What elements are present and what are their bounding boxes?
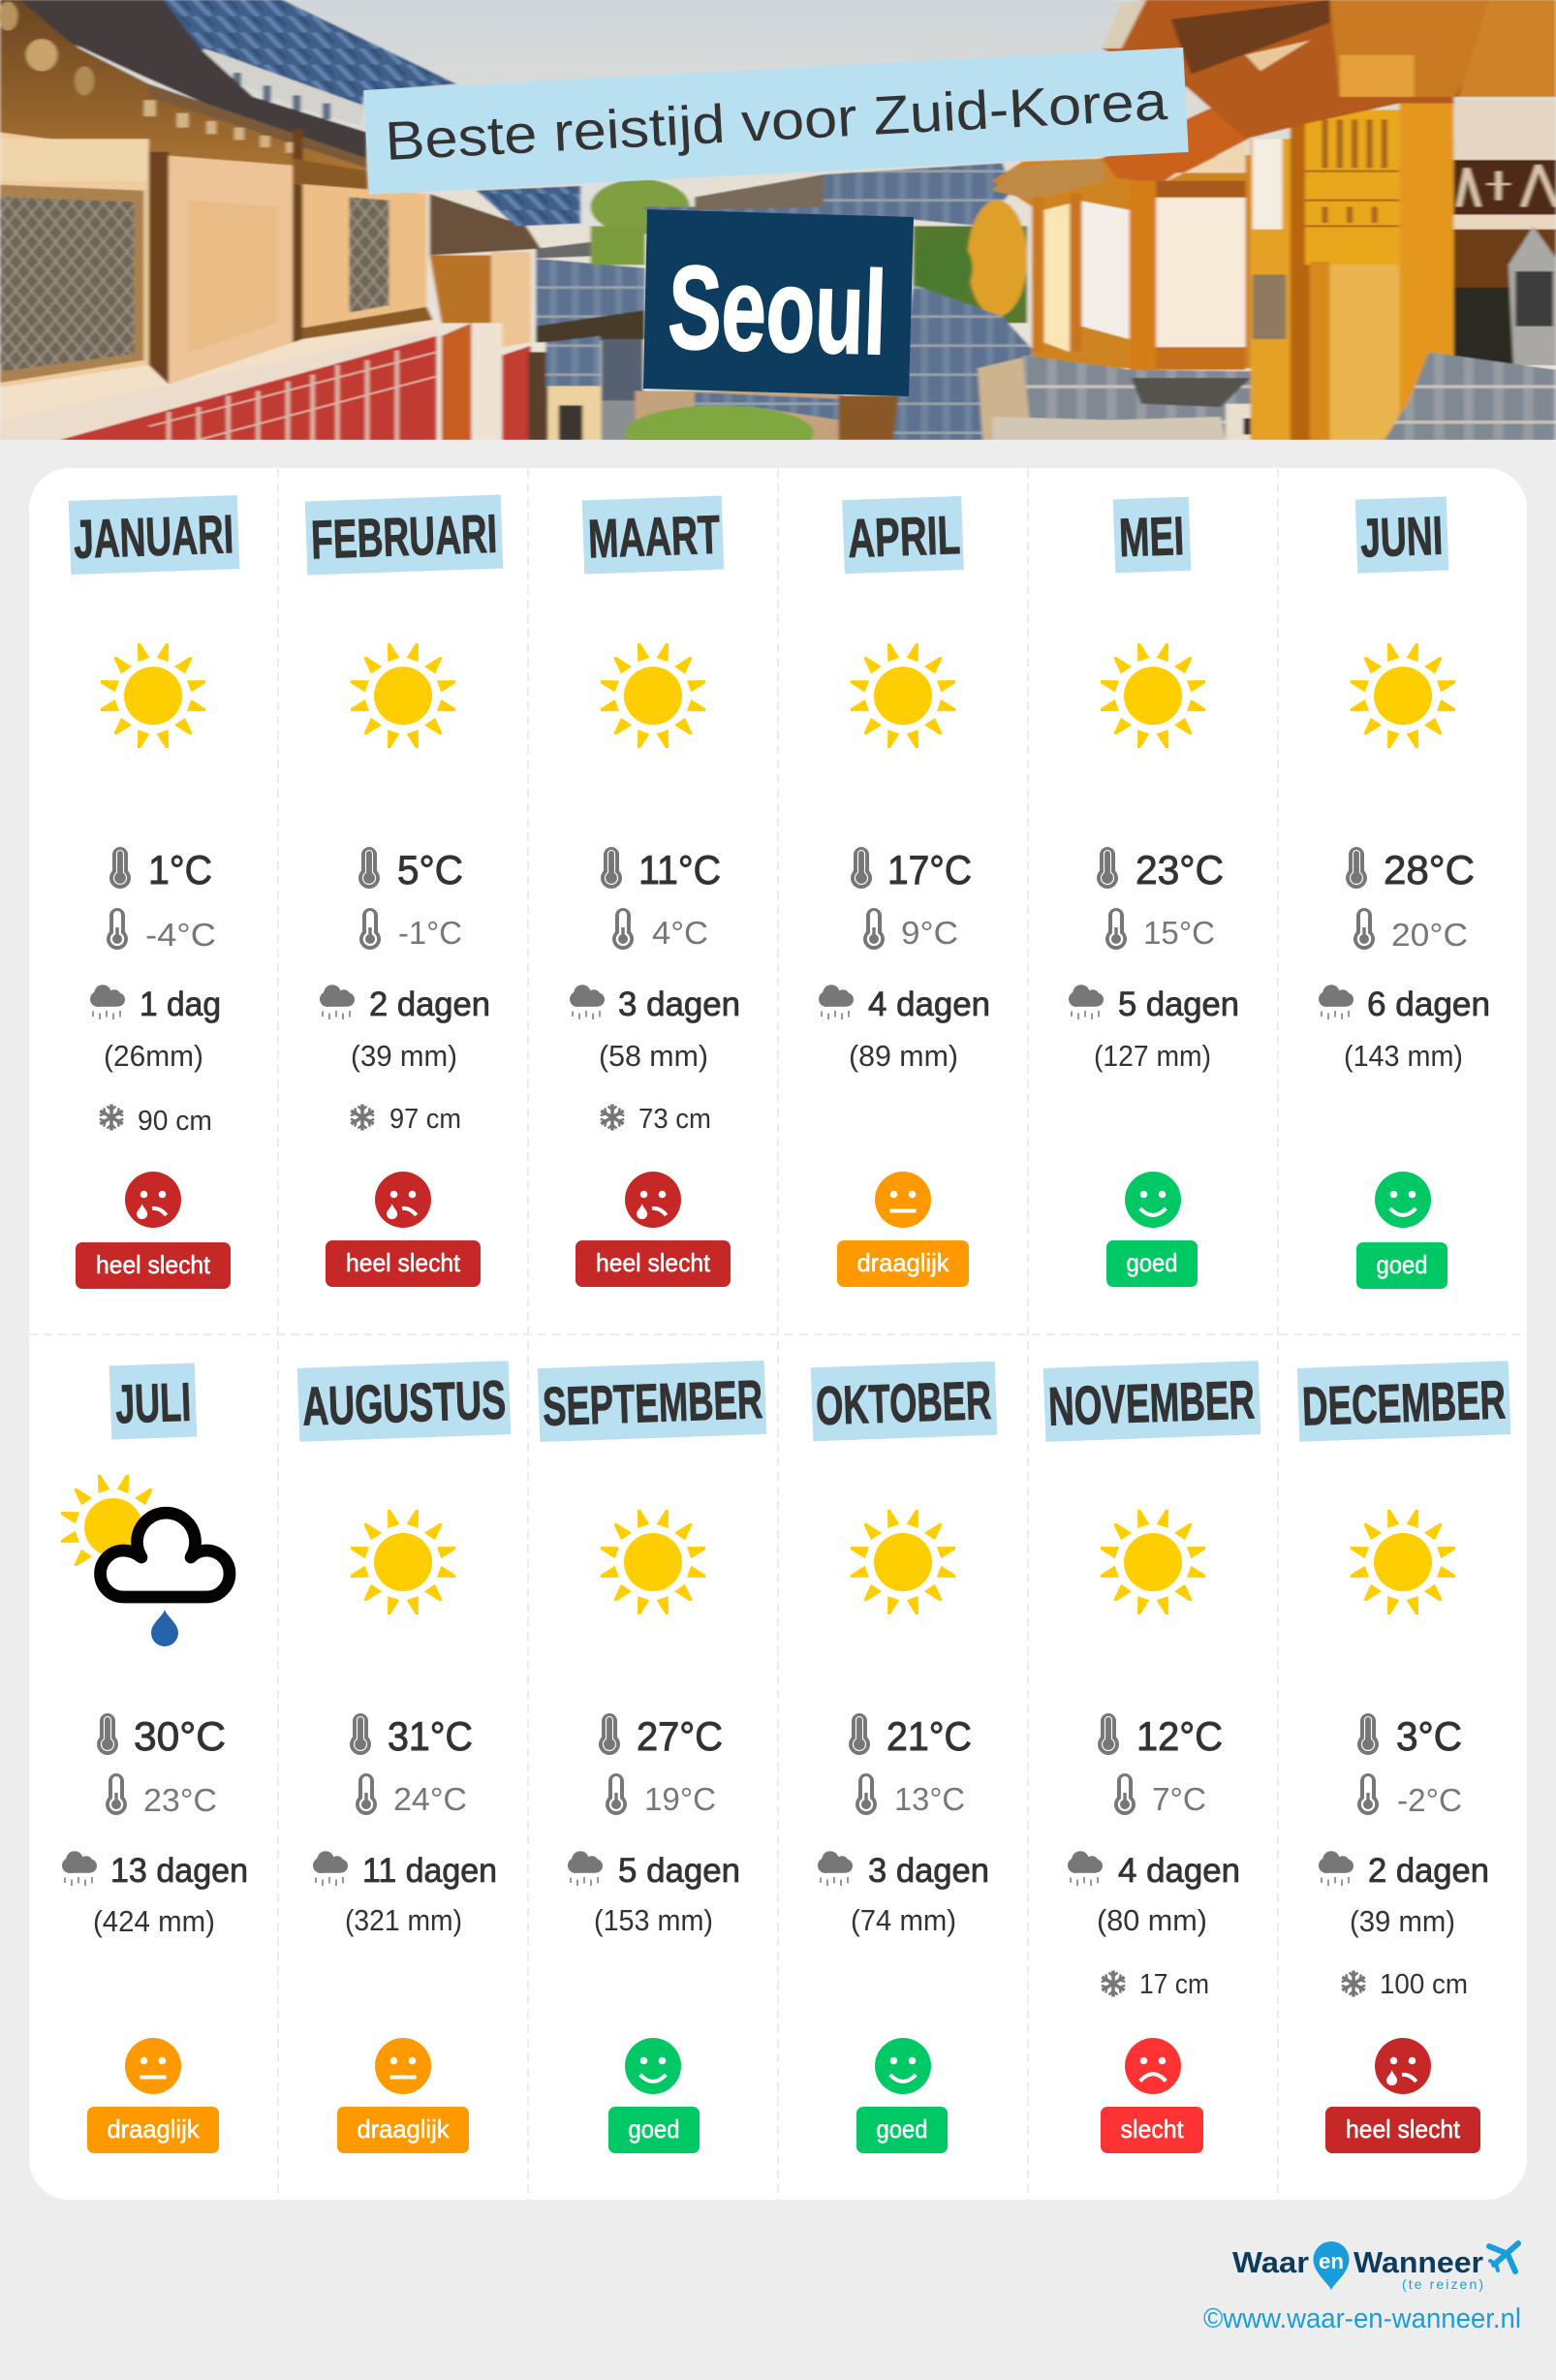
rating face bbox=[125, 2038, 181, 2094]
month label bbox=[582, 496, 724, 574]
max temperature bbox=[851, 847, 972, 892]
month label: FEBRUARI bbox=[310, 503, 498, 570]
max temperature bbox=[109, 847, 212, 892]
icon: sun bbox=[1101, 643, 1205, 748]
icon: airplane bbox=[1489, 2243, 1518, 2271]
panel: calendar card bbox=[29, 468, 1527, 2200]
rating face bbox=[1125, 2038, 1181, 2094]
month label bbox=[538, 1361, 766, 1442]
rain days bbox=[819, 985, 990, 1023]
max temperature bbox=[1097, 847, 1224, 892]
month label: SEPTEMBER bbox=[542, 1368, 763, 1437]
icon: sun bbox=[1351, 643, 1455, 748]
panel: juli bbox=[61, 1362, 248, 2153]
month label: OKTOBER bbox=[815, 1369, 992, 1436]
rating badge: heel slecht bbox=[346, 1248, 461, 1277]
right wall and signage bbox=[1454, 100, 1556, 160]
logo: Waar en Wanneer bbox=[1232, 2241, 1518, 2292]
month label bbox=[305, 494, 503, 576]
rating badge bbox=[856, 2107, 948, 2153]
rainfall: (321 mm) bbox=[345, 1903, 462, 1937]
rainfall: (153 mm) bbox=[594, 1903, 713, 1937]
rain days bbox=[568, 1851, 740, 1890]
panel: oktober bbox=[811, 1362, 997, 2153]
rating face bbox=[625, 2038, 681, 2094]
rain days: 13 dagen bbox=[110, 1852, 248, 1890]
title banner: Beste reistijd voor Zuid-Korea bbox=[384, 70, 1169, 172]
rating face bbox=[1375, 1172, 1431, 1228]
min temperature bbox=[1105, 908, 1215, 951]
rating face bbox=[375, 1172, 431, 1228]
month label bbox=[1113, 497, 1191, 573]
title banner bbox=[363, 47, 1189, 195]
max temperature bbox=[1098, 1713, 1223, 1759]
max temperature: 30°C bbox=[134, 1713, 226, 1759]
rating face bbox=[625, 1172, 681, 1228]
top right eaves bbox=[1101, 0, 1465, 139]
centre-left building bbox=[430, 194, 541, 255]
rating badge bbox=[337, 2107, 469, 2153]
rating badge bbox=[576, 1240, 731, 1287]
rating badge bbox=[837, 1240, 969, 1287]
icon: sun bbox=[851, 643, 955, 748]
rating badge: goed bbox=[1126, 1248, 1178, 1277]
rating face bbox=[875, 1172, 931, 1228]
month label: AUGUSTUS bbox=[301, 1368, 507, 1437]
website credit: ©www.waar-en-wanneer.nl bbox=[1203, 2303, 1521, 2334]
month label: JANUARI bbox=[73, 503, 234, 570]
min temperature bbox=[1354, 908, 1468, 953]
icon: sun behind rain cloud bbox=[61, 1475, 230, 1646]
rating badge: goed bbox=[876, 2114, 928, 2144]
rain days: 3 dagen bbox=[868, 1852, 989, 1890]
min temperature: 15°C bbox=[1143, 915, 1215, 951]
rainfall: (74 mm) bbox=[851, 1903, 956, 1937]
month label bbox=[109, 1362, 197, 1440]
icon: sun bbox=[851, 1510, 955, 1614]
min temperature bbox=[606, 1773, 716, 1817]
rain days bbox=[1068, 1851, 1240, 1890]
max temperature: 1°C bbox=[148, 847, 212, 892]
header photo: Seoul hanok street bbox=[0, 0, 1556, 460]
rainfall: (39 mm) bbox=[351, 1039, 457, 1073]
left upper beams bbox=[0, 0, 369, 194]
tree + sky gap bbox=[577, 184, 608, 225]
min temperature: 20°C bbox=[1391, 917, 1468, 953]
icon: sun bbox=[101, 643, 205, 748]
rating badge: draaglijk bbox=[856, 1248, 949, 1277]
max temperature: 21°C bbox=[887, 1713, 972, 1759]
rain days: 5 dagen bbox=[618, 1852, 740, 1890]
min temperature bbox=[856, 1773, 965, 1817]
icon: sun bbox=[1351, 1510, 1455, 1614]
snowfall bbox=[1100, 1969, 1209, 2000]
rating face bbox=[1375, 2038, 1431, 2094]
min temperature: -2°C bbox=[1397, 1782, 1462, 1818]
rain days: 11 dagen bbox=[362, 1852, 497, 1890]
rating badge: draaglijk bbox=[107, 2114, 200, 2144]
rainfall: (89 mm) bbox=[849, 1039, 958, 1073]
rain days bbox=[1069, 985, 1239, 1023]
logo: Waar en Wanneer: Wanneer bbox=[1354, 2245, 1483, 2279]
min temperature bbox=[863, 908, 958, 951]
panel: februari bbox=[305, 494, 503, 1287]
panel: juni bbox=[1319, 496, 1490, 1289]
right golden wood bbox=[1251, 139, 1291, 440]
month label bbox=[842, 496, 964, 574]
rating face bbox=[1125, 1172, 1181, 1228]
rating badge bbox=[608, 2107, 700, 2153]
rating badge: goed bbox=[628, 2114, 680, 2144]
max temperature bbox=[358, 847, 463, 892]
min temperature: 7°C bbox=[1152, 1781, 1206, 1817]
rain days: 2 dagen bbox=[1368, 1852, 1489, 1890]
min temperature: 13°C bbox=[894, 1781, 965, 1817]
rainfall: (26mm) bbox=[104, 1039, 203, 1073]
rain days: 1 dag bbox=[140, 986, 221, 1023]
rain days bbox=[90, 985, 221, 1023]
snowfall: 17 cm bbox=[1139, 1969, 1209, 2000]
rating badge bbox=[76, 1242, 231, 1289]
month label: JULI bbox=[114, 1371, 192, 1434]
icon: map pin bbox=[1314, 2241, 1349, 2290]
month label: APRIL bbox=[847, 504, 961, 569]
rainfall: (127 mm) bbox=[1094, 1039, 1211, 1073]
rain days: 4 dagen bbox=[868, 986, 990, 1023]
snowfall bbox=[98, 1105, 212, 1137]
panel: maart bbox=[570, 496, 740, 1287]
month label bbox=[1355, 496, 1448, 574]
min temperature: 23°C bbox=[143, 1782, 217, 1818]
max temperature: 11°C bbox=[638, 847, 721, 892]
month label bbox=[69, 495, 239, 575]
rating badge bbox=[1325, 2107, 1480, 2153]
icon: sun bbox=[1101, 1510, 1205, 1614]
min temperature bbox=[1357, 1773, 1462, 1818]
min temperature bbox=[612, 908, 708, 951]
rating badge bbox=[1106, 1240, 1198, 1287]
icon: sun bbox=[601, 643, 705, 748]
month label bbox=[1043, 1361, 1260, 1442]
max temperature bbox=[1357, 1713, 1462, 1759]
max temperature: 3°C bbox=[1396, 1713, 1462, 1759]
rain days: 4 dagen bbox=[1118, 1852, 1240, 1890]
panel: november bbox=[1043, 1361, 1260, 2153]
icon: map pin: en bbox=[1319, 2249, 1344, 2273]
snowfall: 100 cm bbox=[1380, 1969, 1468, 2000]
city name banner: Seoul bbox=[667, 241, 888, 379]
mid trees bbox=[913, 226, 1027, 323]
min temperature: 9°C bbox=[901, 915, 958, 951]
icon: sun bbox=[351, 643, 455, 748]
max temperature: 31°C bbox=[388, 1713, 473, 1759]
logo: Waar en Wanneer: Waar bbox=[1232, 2245, 1309, 2279]
right low tiled wall bbox=[1021, 355, 1254, 438]
min temperature: 19°C bbox=[644, 1781, 716, 1817]
max temperature: 5°C bbox=[397, 847, 463, 892]
month label: JUNI bbox=[1359, 505, 1444, 568]
snowfall: 97 cm bbox=[389, 1104, 461, 1135]
rain days: 6 dagen bbox=[1367, 986, 1490, 1023]
rating badge bbox=[326, 1240, 481, 1287]
month label: MEI bbox=[1118, 505, 1185, 568]
icon: sun bbox=[351, 1510, 455, 1614]
rating badge: slecht bbox=[1120, 2114, 1184, 2144]
max temperature: 28°C bbox=[1384, 847, 1475, 892]
logo: Waar en Wanneer: (te reizen) bbox=[1402, 2276, 1483, 2292]
rating face bbox=[125, 1172, 181, 1228]
max temperature bbox=[599, 1713, 723, 1759]
min temperature: 4°C bbox=[652, 915, 708, 951]
min temperature: -1°C bbox=[398, 915, 462, 951]
rating badge: heel slecht bbox=[1346, 2114, 1461, 2144]
rain days: 5 dagen bbox=[1118, 986, 1239, 1023]
rainfall: (39 mm) bbox=[1350, 1904, 1455, 1938]
month label: MAART bbox=[587, 504, 721, 569]
max temperature: 27°C bbox=[637, 1713, 723, 1759]
rating face bbox=[375, 2038, 431, 2094]
panel: september bbox=[538, 1361, 766, 2153]
rain days bbox=[320, 985, 490, 1023]
panel: januari bbox=[69, 495, 239, 1289]
min temperature bbox=[106, 1773, 217, 1818]
rain days: 2 dagen bbox=[369, 986, 490, 1023]
right building bbox=[992, 155, 1251, 368]
city name banner bbox=[643, 209, 914, 396]
max temperature: 17°C bbox=[887, 847, 972, 892]
lower plaster and red frieze bbox=[0, 320, 436, 420]
max temperature: 23°C bbox=[1136, 847, 1224, 892]
panel: augustus bbox=[297, 1361, 511, 2153]
rating badge: draaglijk bbox=[357, 2114, 450, 2144]
panel: december bbox=[1297, 1361, 1510, 2153]
rating face bbox=[875, 2038, 931, 2094]
icon: sun bbox=[601, 1510, 705, 1614]
rating badge: heel slecht bbox=[596, 1248, 711, 1277]
rain days bbox=[1319, 1851, 1489, 1890]
centre-bottom roofs bbox=[636, 391, 844, 440]
rainfall: (424 mm) bbox=[93, 1904, 215, 1938]
rain days bbox=[818, 1851, 989, 1890]
snowfall bbox=[599, 1104, 711, 1135]
month label: NOVEMBER bbox=[1047, 1368, 1256, 1437]
max temperature bbox=[350, 1713, 473, 1759]
max temperature: 12°C bbox=[1136, 1713, 1223, 1759]
rating badge bbox=[1101, 2107, 1203, 2153]
left plaster wall + window bbox=[0, 133, 149, 388]
snowfall: 73 cm bbox=[638, 1104, 711, 1135]
min temperature bbox=[1114, 1773, 1206, 1817]
rainfall: (58 mm) bbox=[599, 1039, 708, 1073]
min temperature: -4°C bbox=[145, 917, 216, 953]
min temperature bbox=[356, 1773, 467, 1817]
rainfall: (143 mm) bbox=[1344, 1039, 1463, 1073]
panel: april bbox=[819, 496, 990, 1287]
snowfall bbox=[1340, 1969, 1468, 2000]
snowfall: 90 cm bbox=[138, 1106, 212, 1137]
month label bbox=[297, 1361, 511, 1442]
blue tile roof bbox=[164, 0, 456, 124]
rainfall: (80 mm) bbox=[1097, 1903, 1207, 1937]
rain days: 3 dagen bbox=[618, 986, 740, 1023]
max temperature bbox=[849, 1713, 972, 1759]
month label bbox=[811, 1362, 997, 1441]
panel: mei bbox=[1069, 497, 1239, 1287]
rating badge bbox=[1356, 1242, 1447, 1289]
far roofs bbox=[645, 163, 1012, 226]
dark eave bbox=[19, 0, 367, 158]
snowfall bbox=[349, 1104, 461, 1135]
min temperature: 24°C bbox=[393, 1781, 467, 1817]
rating badge: heel slecht bbox=[96, 1250, 211, 1279]
rating badge bbox=[87, 2107, 219, 2153]
rain days bbox=[570, 985, 740, 1023]
rating badge: goed bbox=[1376, 1250, 1428, 1279]
max temperature bbox=[601, 847, 721, 892]
min temperature bbox=[359, 908, 462, 951]
min temperature bbox=[107, 908, 216, 953]
